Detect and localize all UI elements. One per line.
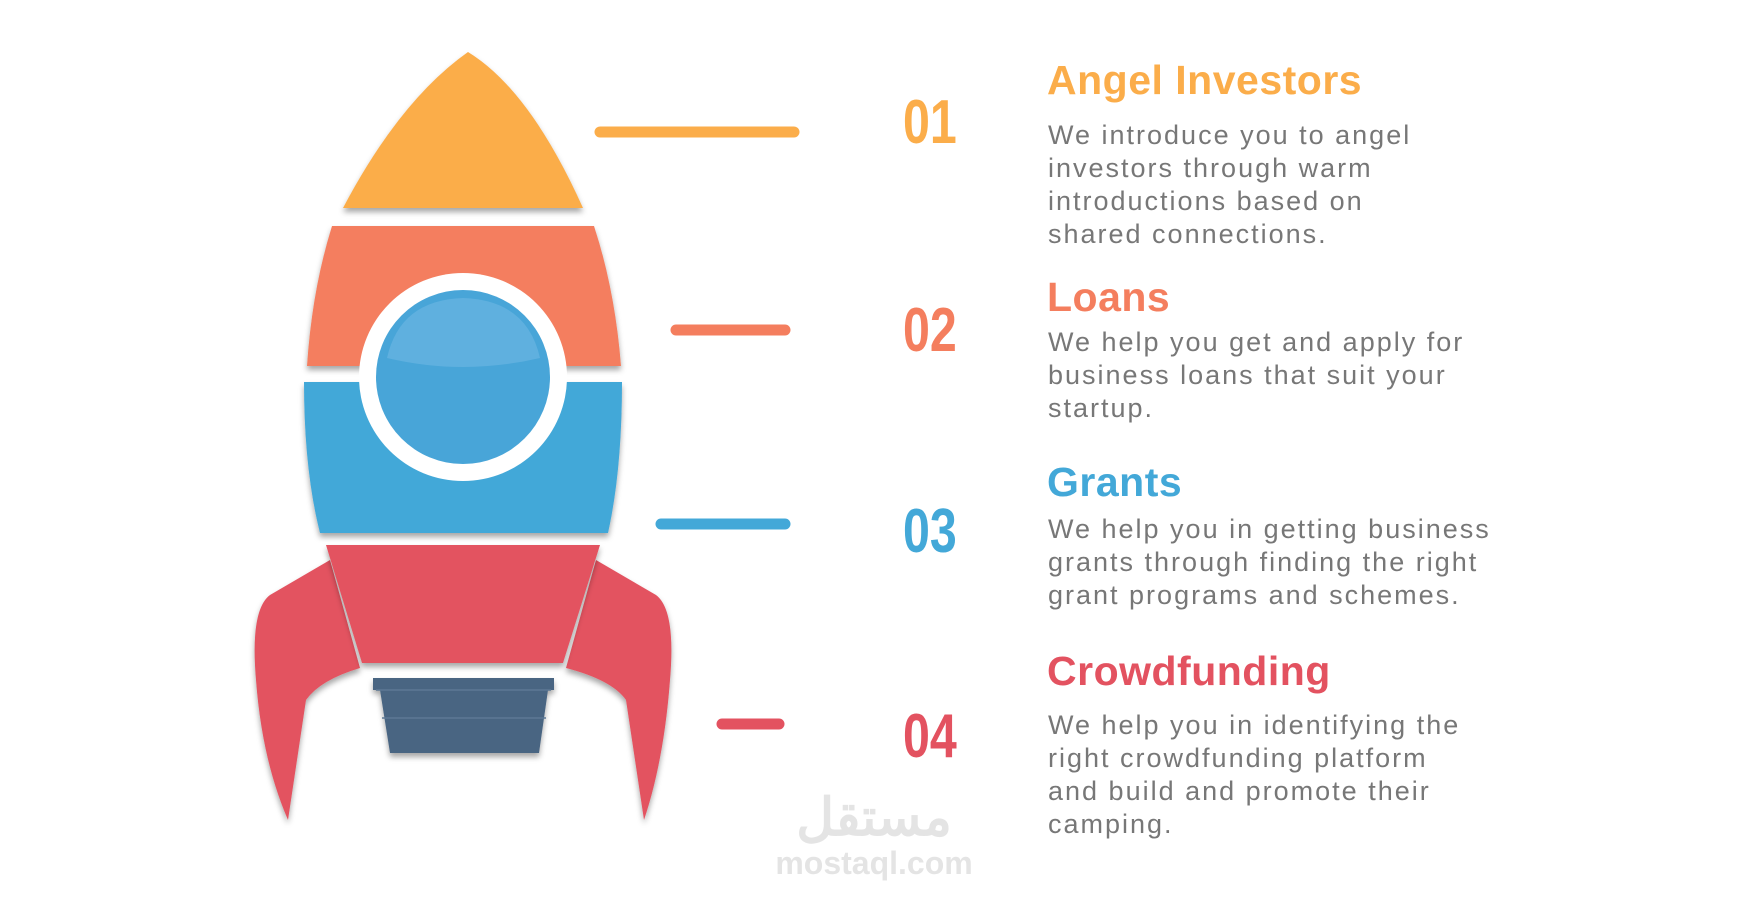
text: crowdfunding: camping. <box>1048 809 1174 839</box>
text: angel: introductions based on <box>1048 186 1364 216</box>
number 01: 01 <box>903 88 957 157</box>
text: angel <box>1048 120 1411 249</box>
text: loans: startup. <box>1048 393 1154 423</box>
title: Angel Investors: Angel Investors <box>1047 57 1362 103</box>
watermark <box>775 789 973 881</box>
text: loans: We help you get and apply for <box>1048 327 1464 357</box>
text: loans <box>1048 327 1464 423</box>
red body <box>326 545 600 663</box>
nose cone <box>343 52 583 208</box>
blue band <box>304 382 622 533</box>
number 04: 04 <box>903 702 957 771</box>
number 02: 02 <box>903 296 957 365</box>
fins <box>255 560 671 820</box>
porthole <box>359 273 567 481</box>
text: grants: We help you in getting business <box>1048 514 1491 544</box>
text: crowdfunding: right crowdfunding platform <box>1048 743 1428 773</box>
orange band <box>307 226 621 366</box>
title: Crowdfunding: Crowdfunding <box>1047 648 1331 694</box>
text: crowdfunding: We help you in identifying the <box>1048 710 1460 740</box>
title: Grants: Grants <box>1047 459 1182 505</box>
title: Loans: Loans <box>1047 274 1170 320</box>
text: crowdfunding <box>1048 710 1460 839</box>
number 03: 03 <box>903 497 957 566</box>
text: loans: business loans that suit your <box>1048 360 1447 390</box>
text: angel: investors through warm <box>1048 153 1373 183</box>
text: grants: grant programs and schemes. <box>1048 580 1461 610</box>
watermark: مستقل <box>796 789 952 847</box>
text: angel: shared connections. <box>1048 219 1328 249</box>
text: crowdfunding: and build and promote their <box>1048 776 1431 806</box>
connector lines <box>600 132 794 724</box>
exhaust <box>373 678 554 753</box>
text: grants: grants through finding the right <box>1048 547 1478 577</box>
text: grants <box>1048 514 1491 610</box>
watermark: mostaql.com <box>775 845 973 881</box>
text: angel: We introduce you to angel <box>1048 120 1411 150</box>
